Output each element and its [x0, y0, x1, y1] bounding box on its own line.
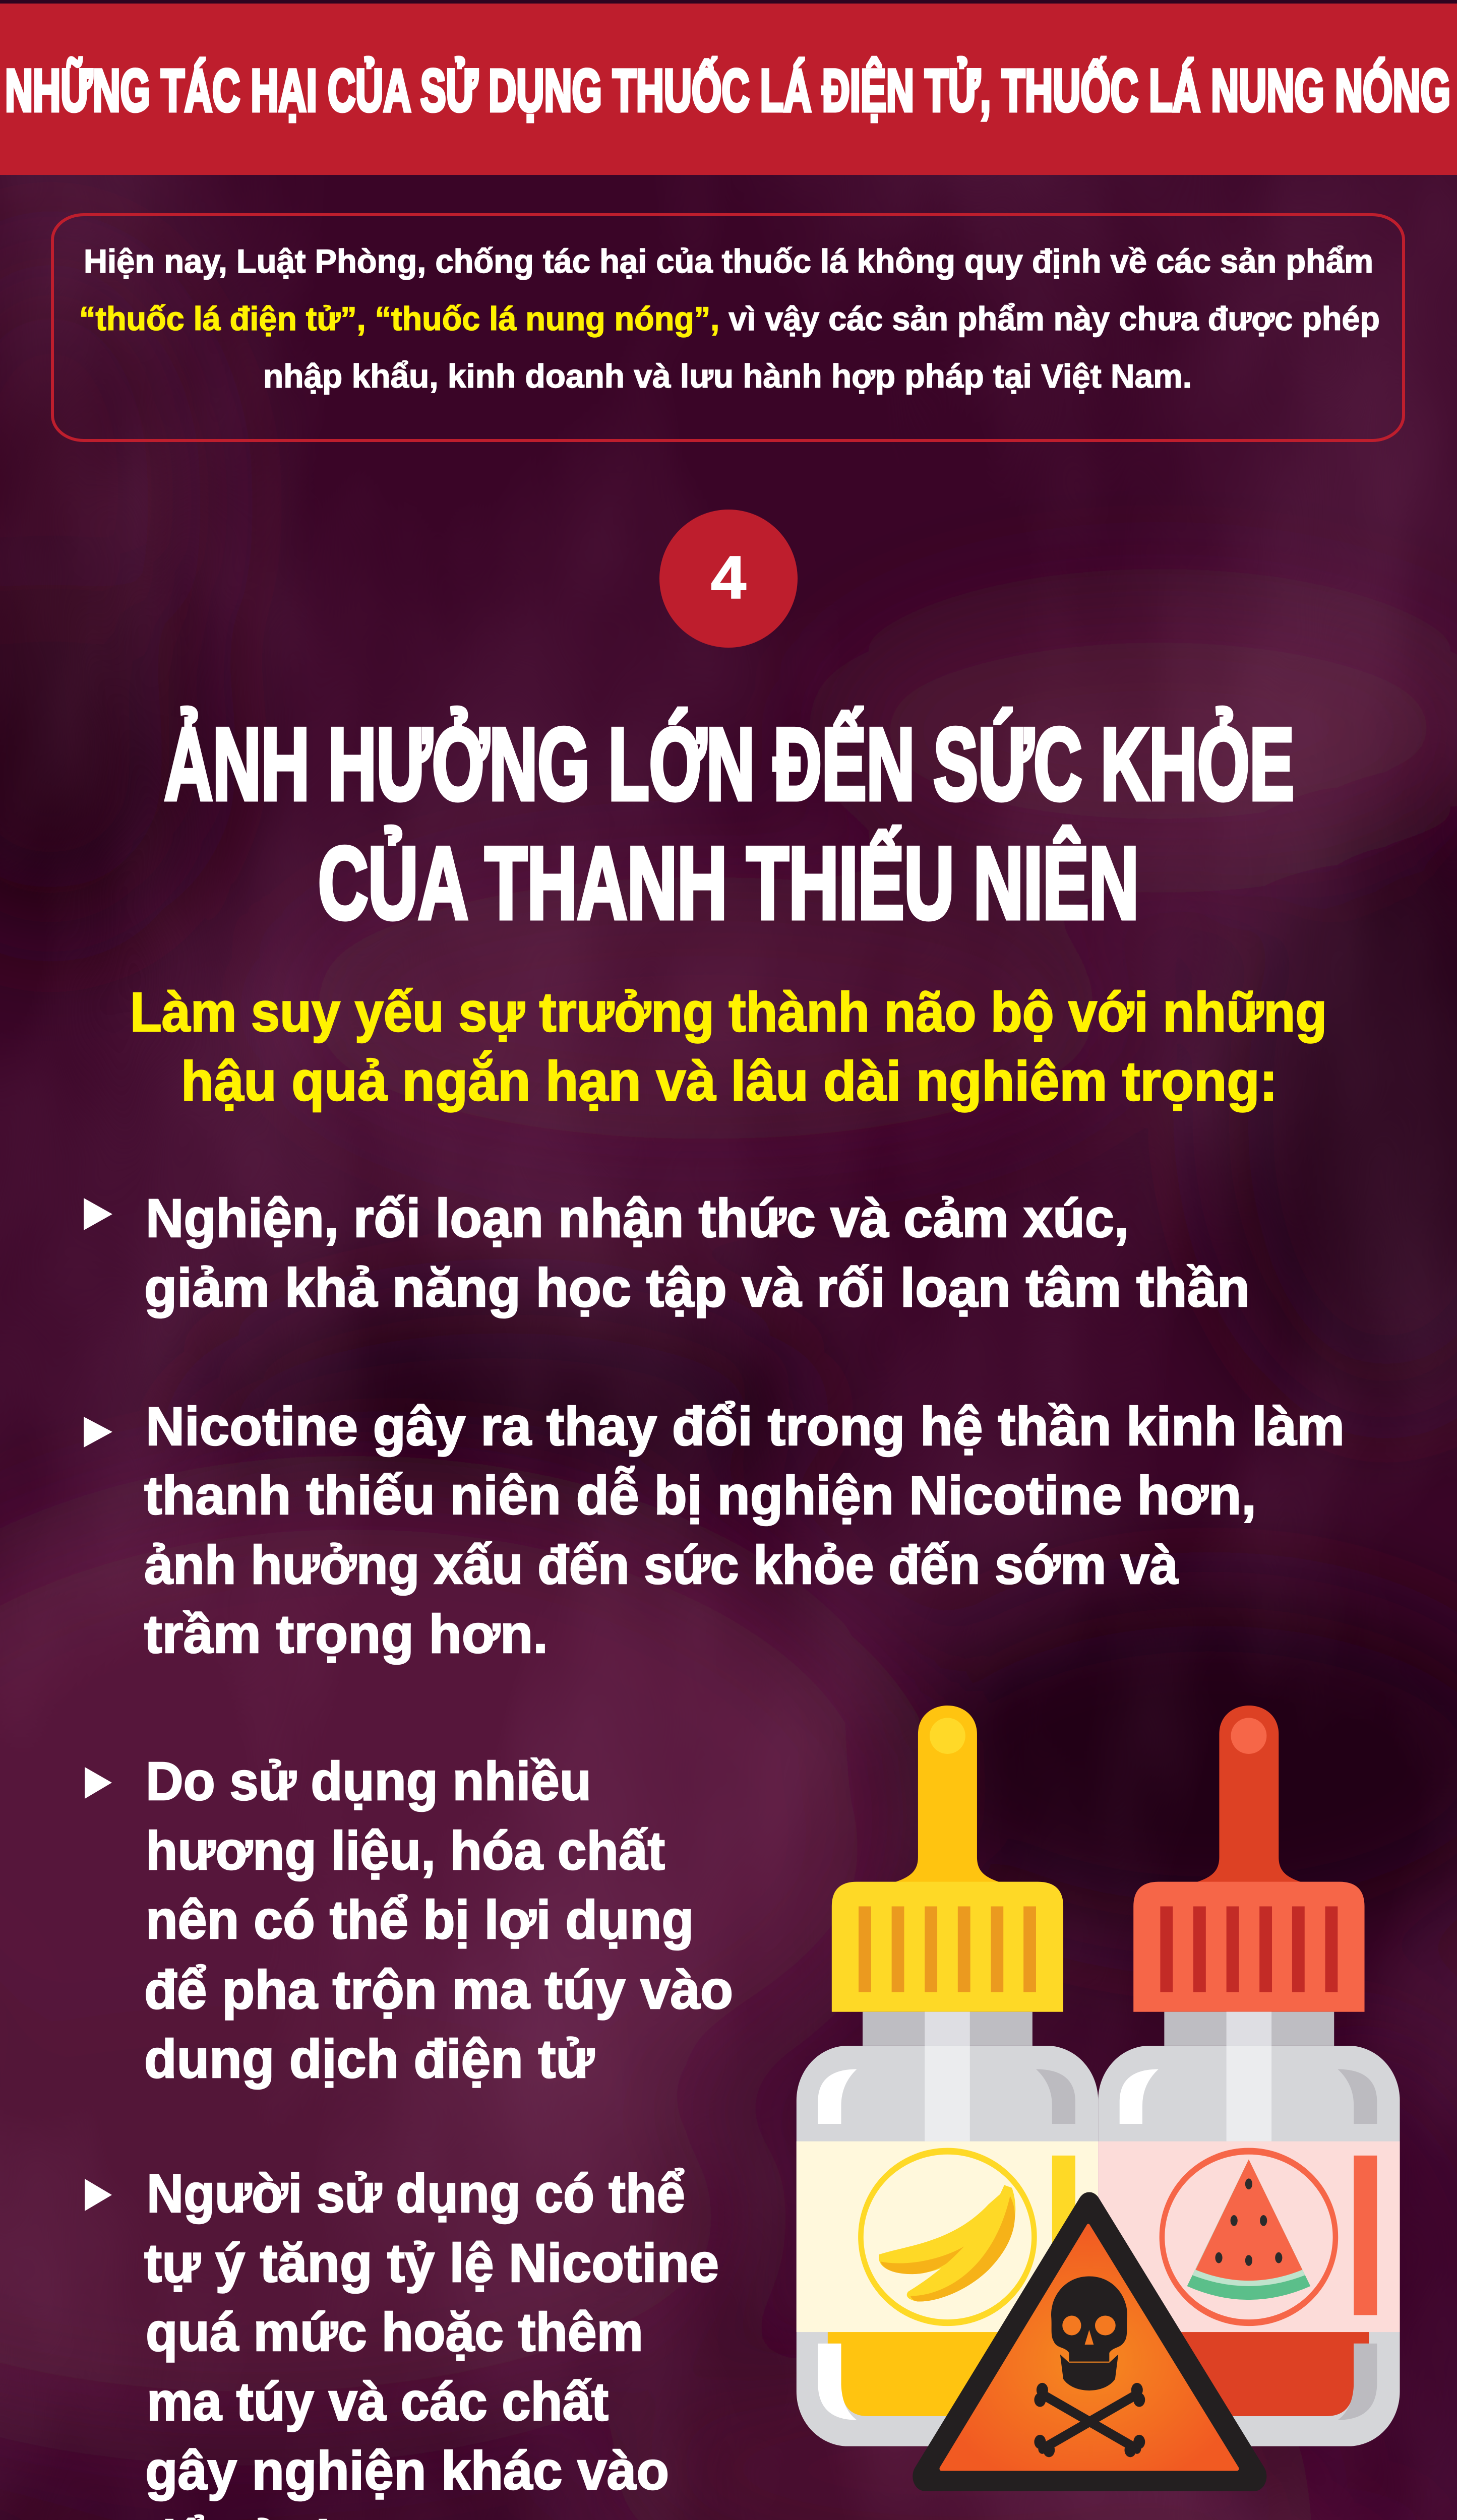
- bullet 4: Người sử dụng có thể: [147, 2163, 685, 2224]
- bullet 2: thanh thiếu niên dễ bị nghiện Nicotine hơn,: [144, 1465, 1256, 1526]
- bullet 3: để pha trộn ma túy vào: [144, 1959, 733, 2020]
- icon: banana: [879, 2185, 1015, 2301]
- bullet 4: [85, 2163, 719, 2520]
- intro callout box: “thuốc lá điện tử”, “thuốc lá nung nóng”, vì vậy các sản phẩm này chưa được phép: [79, 300, 1380, 337]
- title band: [0, 0, 1457, 175]
- yellow subheading: hậu quả ngắn hạn và lâu dài nghiêm trọng:: [181, 1050, 1278, 1112]
- number badge: [659, 510, 798, 648]
- intro callout box: Hiện nay, Luật Phòng, chống tác hại của thuốc lá không quy định về các sản phẩm: [84, 242, 1373, 280]
- number badge: 4: [711, 544, 746, 611]
- bullet 4: tự ý tăng tỷ lệ Nicotine: [144, 2232, 719, 2293]
- bullet 1: giảm khả năng học tập và rối loạn tâm thần: [144, 1257, 1250, 1318]
- yellow subheading: Làm suy yếu sự trưởng thành não bộ với những: [130, 981, 1327, 1043]
- bullet 2: [84, 1396, 1345, 1664]
- bullet 3: nên có thể bị lợi dụng: [146, 1889, 694, 1950]
- bullet 4: quá mức hoặc thêm: [146, 2301, 643, 2362]
- intro callout box: nhập khẩu, kinh doanh và lưu hành hợp pháp tại Việt Nam.: [263, 357, 1192, 395]
- icon: skull warning triangle: [925, 2207, 1254, 2476]
- bullet 2: ảnh hưởng xấu đến sức khỏe đến sớm và: [144, 1534, 1179, 1595]
- bullet 4: ma túy và các chất: [147, 2371, 609, 2432]
- yellow subheading: [130, 981, 1327, 1112]
- bullet 1: Nghiện, rối loạn nhận thức và cảm xúc,: [146, 1187, 1129, 1248]
- icon: yellow banana bottle: [797, 1706, 1098, 2446]
- main heading: [164, 707, 1294, 940]
- bullet 3: hương liệu, hóa chất: [146, 1820, 665, 1881]
- bullet 2: Nicotine gây ra thay đổi trong hệ thần kinh làm: [146, 1396, 1345, 1457]
- bullet 4: gây nghiện khác vào: [145, 2440, 669, 2501]
- bullet 2: trầm trọng hơn.: [144, 1603, 548, 1664]
- bullet 3: Do sử dụng nhiều: [146, 1750, 591, 1811]
- bullet 3: [85, 1750, 733, 2089]
- icon: watermelon: [1187, 2159, 1310, 2300]
- bullet 3: dung dịch điện tử: [144, 2028, 595, 2089]
- illustration: e-liquid bottles with warning sign: [797, 1706, 1400, 2476]
- intro callout box: [52, 215, 1404, 440]
- bullet 1: [84, 1187, 1250, 1318]
- icon: red watermelon bottle: [1098, 1706, 1400, 2446]
